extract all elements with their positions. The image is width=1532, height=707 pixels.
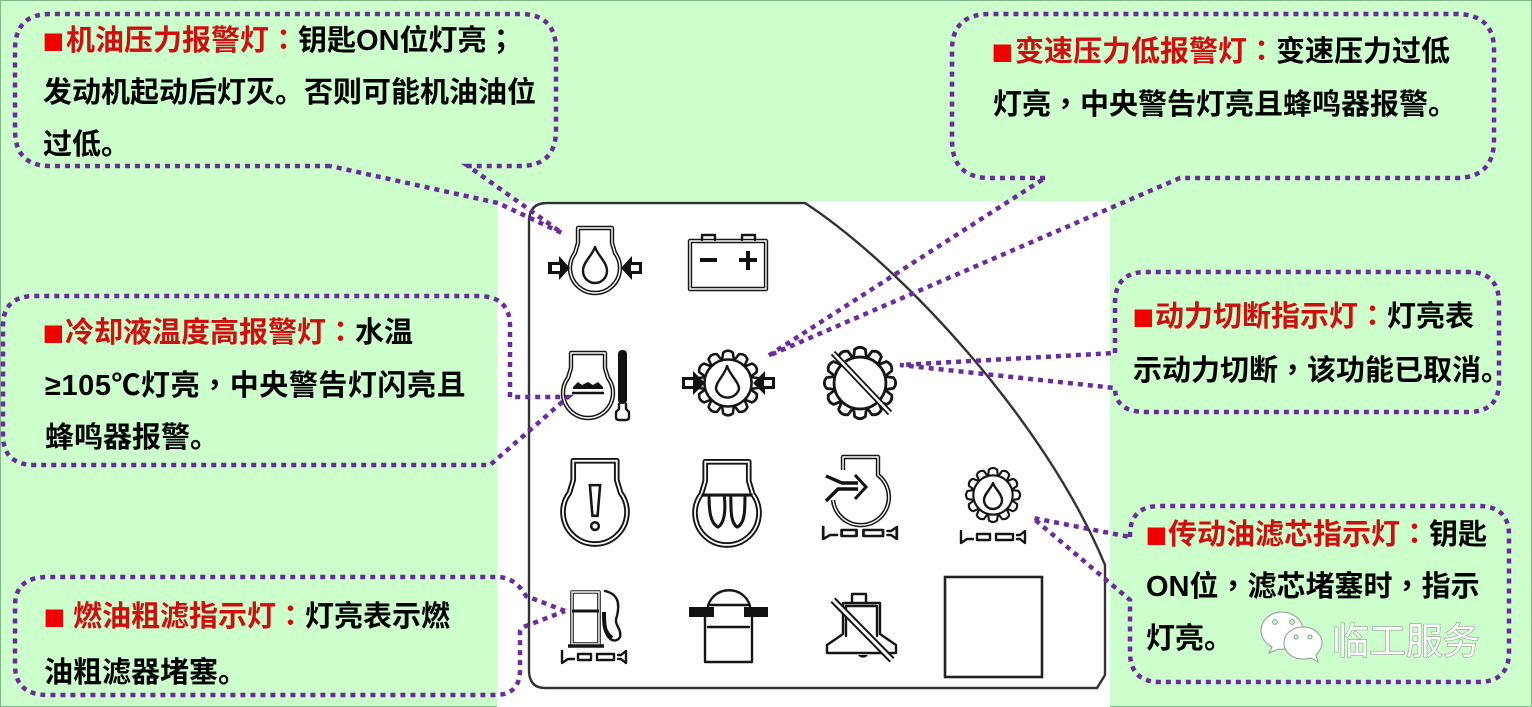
watermark: wechat logo and account name [1261,612,1480,662]
callout: oil pressure warning lamp: 机油压力报警灯：钥匙ON位灯亮； [66,17,516,59]
callout: fuel coarse filter indicator: 油粗滤器堵塞。 [44,656,247,689]
icon: transmission filter gear with chassis base [961,468,1025,543]
icon: air filter canister [689,590,768,662]
callout: transmission oil filter indicator [1033,506,1509,682]
callout: transmission pressure low warning lamp: ■ [992,31,1013,72]
watermark text: 临工服务 [1332,621,1480,662]
icon: engine oil pressure [548,228,642,293]
callout: oil pressure warning lamp: 发动机起动后灯灭。否则可能机油油位 [43,76,536,109]
panel: instrument warning lamp board [497,201,1110,707]
callout: coolant temperature warning lamp: ■ [42,312,64,353]
callout: fuel coarse filter indicator [15,577,565,695]
callout: power cut-off indicator: 示动力切断，该功能已取消。 [1133,347,1510,389]
icon: wechat bubbles [1261,612,1322,662]
callout: transmission oil filter indicator: ■ [1146,514,1167,555]
icon: blank lamp square [945,577,1042,677]
icon: engine warning [563,461,627,544]
callout: coolant temperature warning lamp: 冷却液温度高报警灯：水温 [65,309,413,351]
callout: power cut-off indicator: ■ [1132,296,1154,337]
icon: coolant temperature [563,350,629,420]
callout: fuel coarse filter indicator: ■ [44,596,65,637]
callout: transmission pressure low warning lamp: 灯亮，中央警告灯亮且蜂鸣器报警。 [993,81,1457,123]
callout: fuel coarse filter indicator: 燃油粗滤指示灯：灯亮表示燃 [73,593,450,635]
callout: oil pressure warning lamp: 过低。 [43,128,130,161]
callout: transmission oil filter indicator: ON位，滤芯堵塞时，指示 [1146,563,1480,605]
callout: coolant temperature warning lamp [3,296,568,465]
callout: transmission pressure low warning lamp: 变速压力低报警灯：变速压力过低 [1015,28,1450,70]
callout: transmission oil filter indicator: 灯亮。 [1146,622,1233,655]
icon: battery [690,235,766,289]
callout: oil pressure warning lamp [15,14,562,233]
callout: transmission pressure low warning lamp [768,14,1494,356]
icon: buzzer muted bell [827,594,896,660]
callout: power cut-off indicator: 动力切断指示灯：灯亮表 [1155,293,1474,335]
callout: oil pressure warning lamp: ■ [42,20,64,61]
icon: engine air intake with chassis base [823,457,897,539]
icon: engine with preheat drops [695,462,759,545]
icon: gear crossed out [824,347,896,419]
icon: transmission gear with drop and arrows [682,351,775,415]
callout: transmission oil filter indicator: 传动油滤芯指示灯：钥匙 [1168,511,1487,553]
panel outline [529,203,1105,688]
icon: fuel pump with chassis base [562,591,626,663]
callout: coolant temperature warning lamp: ≥105℃灯亮，中央警告灯闪亮且 [45,362,466,404]
callout: power cut-off indicator [900,272,1510,412]
callout: coolant temperature warning lamp: 蜂鸣器报警。 [45,421,219,454]
